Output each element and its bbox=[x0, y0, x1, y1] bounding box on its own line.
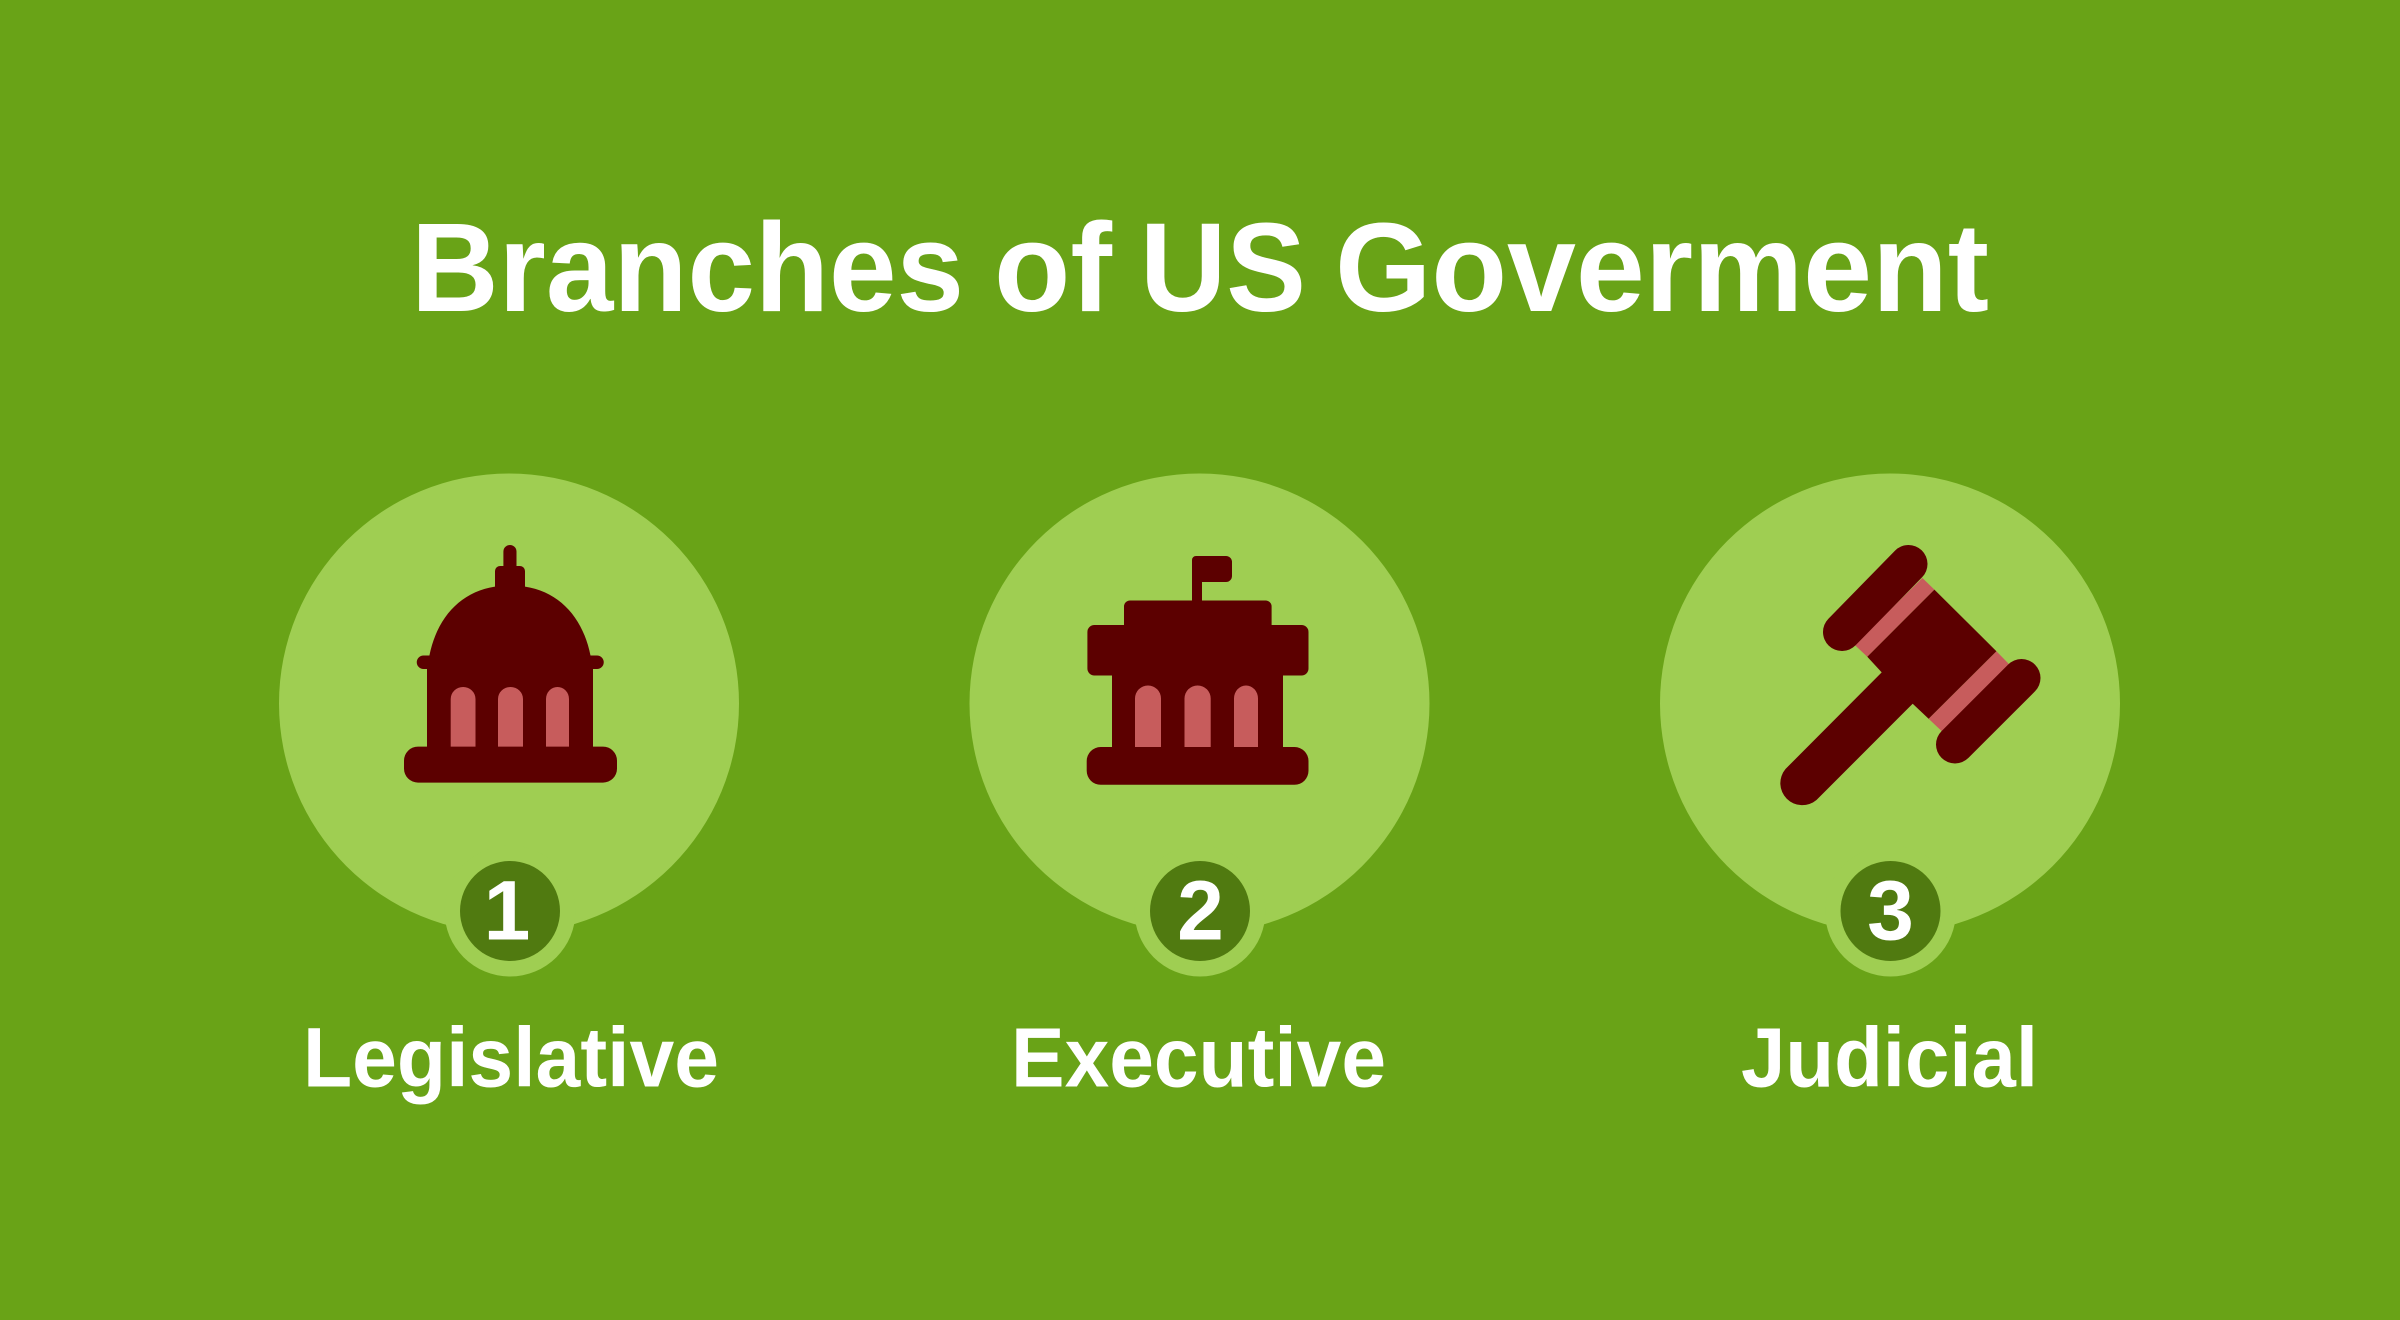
icon: government building bbox=[1087, 556, 1308, 785]
number badge 1: 1 bbox=[484, 864, 530, 958]
number badge 3 bbox=[1840, 861, 1940, 961]
icon: capitol dome bbox=[404, 545, 617, 783]
label: judicial: Judicial bbox=[1741, 1011, 2038, 1105]
title: Branches bbox=[411, 197, 964, 338]
bubble: legislative bbox=[279, 474, 739, 976]
title: Goverment bbox=[1335, 197, 1989, 338]
label: legislative: Legislative bbox=[303, 1011, 719, 1105]
panel: judicial bbox=[1660, 474, 2120, 1105]
icon: gavel bbox=[1780, 564, 2022, 805]
number badge 1 bbox=[460, 861, 560, 961]
bubble: judicial bbox=[1660, 474, 2120, 976]
bubble: executive bbox=[970, 474, 1430, 976]
panel: executive bbox=[970, 474, 1430, 1105]
number badge 2: 2 bbox=[1177, 864, 1224, 958]
title: US bbox=[1140, 197, 1306, 338]
label: executive: Executive bbox=[1011, 1011, 1386, 1105]
title: of bbox=[994, 197, 1113, 338]
panel: legislative bbox=[279, 474, 739, 1105]
number badge 3: 3 bbox=[1867, 864, 1914, 958]
number badge 2 bbox=[1150, 861, 1250, 961]
